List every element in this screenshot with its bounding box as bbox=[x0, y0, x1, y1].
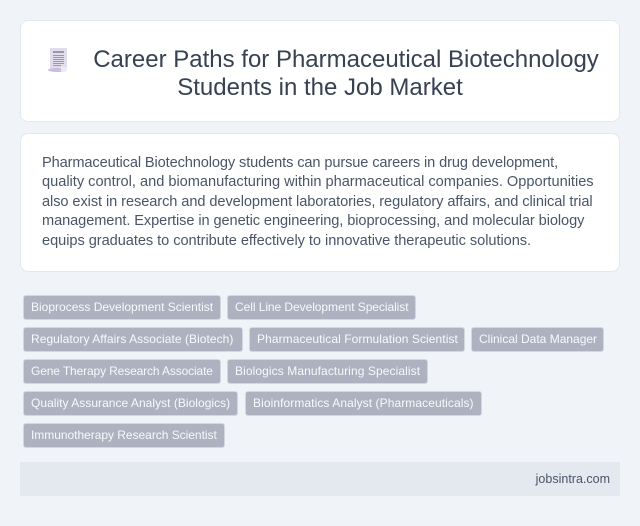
title: Students in the Job Market bbox=[177, 74, 463, 101]
tag: Bioprocess Development Scientist bbox=[31, 300, 213, 314]
tag bbox=[245, 391, 482, 416]
tag: Biologics Manufacturing Specialist bbox=[235, 364, 420, 378]
tag bbox=[249, 327, 465, 352]
icon: document scroll bbox=[48, 48, 67, 72]
career tags bbox=[23, 295, 604, 448]
title bbox=[93, 46, 599, 101]
tag: Quality Assurance Analyst (Biologics) bbox=[31, 396, 230, 410]
description text: management. Expertise in genetic engineering, bioprocessing, and molecular biology bbox=[42, 213, 584, 229]
tag: Gene Therapy Research Associate bbox=[31, 364, 213, 378]
tag: Pharmaceutical Formulation Scientist bbox=[257, 332, 458, 346]
description text: equips graduates to contribute effectively to innovative therapeutic solutions. bbox=[42, 233, 531, 249]
tag: Immunotherapy Research Scientist bbox=[31, 428, 217, 442]
tag: Cell Line Development Specialist bbox=[235, 300, 409, 314]
header panel bbox=[20, 20, 620, 122]
tag bbox=[23, 327, 243, 352]
tag bbox=[23, 359, 221, 384]
description text: also exist in research and development laboratories, regulatory affairs, and clinical trial bbox=[42, 194, 593, 210]
description text: Pharmaceutical Biotechnology students can pursue careers in drug development, bbox=[42, 155, 558, 171]
title: Career Paths for Pharmaceutical Biotechnology bbox=[93, 46, 599, 73]
tag bbox=[23, 391, 238, 416]
tag bbox=[23, 423, 225, 448]
tag bbox=[227, 295, 416, 320]
footer source: jobsintra.com bbox=[536, 472, 610, 486]
footer bar bbox=[20, 462, 620, 496]
tag: Clinical Data Manager bbox=[479, 332, 597, 346]
description text bbox=[42, 155, 594, 249]
tag bbox=[227, 359, 428, 384]
description panel bbox=[20, 133, 620, 272]
tag: Bioinformatics Analyst (Pharmaceuticals) bbox=[253, 396, 474, 410]
tag bbox=[471, 327, 604, 352]
tag: Regulatory Affairs Associate (Biotech) bbox=[31, 332, 233, 346]
tag bbox=[23, 295, 221, 320]
description text: quality control, and biomanufacturing within pharmaceutical companies. Opportunities bbox=[42, 174, 594, 190]
